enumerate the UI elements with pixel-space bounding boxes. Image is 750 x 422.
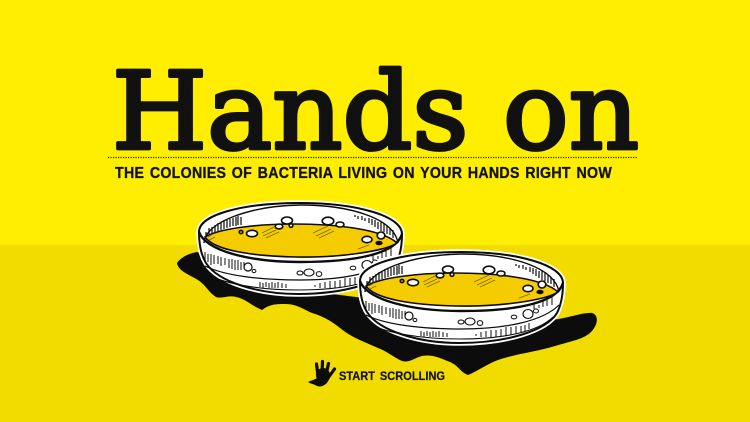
- start scrolling label: START SCROLLING: [339, 369, 445, 383]
- liquid marks: [208, 226, 369, 249]
- inner wall hatching: [206, 215, 393, 238]
- liquid: [205, 224, 397, 257]
- petri dish left: [199, 203, 402, 294]
- bubbles: [239, 217, 385, 276]
- title: Hands on: [112, 50, 639, 174]
- petri dish right: [360, 252, 563, 343]
- icon: hand: [308, 362, 334, 387]
- shadow under dishes: [177, 252, 597, 375]
- subtitle: THE COLONIES OF BACTERIA LIVING ON YOUR HANDS RIGHT NOW: [115, 165, 612, 182]
- outer wall hatching: [205, 248, 391, 288]
